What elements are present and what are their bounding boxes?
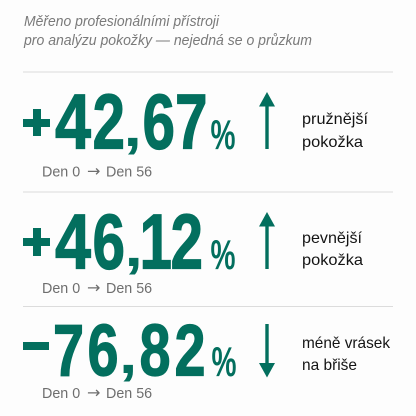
row: firmness [23, 198, 363, 297]
icon: arrow up [259, 212, 275, 269]
icon: arrow down [259, 324, 275, 378]
value: +42,67 %: 2 [92, 78, 125, 165]
row: wrinkles [23, 309, 391, 402]
period [42, 278, 152, 297]
value: +46,12 %: 6 [92, 198, 125, 285]
period: → [87, 278, 100, 297]
value: +42,67 %: 4 [55, 79, 91, 166]
value: −76,82 %: 7 [53, 309, 84, 391]
icon: arrow up [259, 92, 275, 149]
label [302, 111, 369, 151]
label: na břiše [302, 357, 357, 374]
value: +42,67 %: 6 [142, 78, 175, 165]
value: −76,82 %: 8 [140, 309, 171, 391]
value: +42,67 %: , [124, 96, 142, 158]
value: +46,12 % [23, 198, 236, 286]
period: Den 56 [106, 386, 152, 402]
value: −76,82 %: , [119, 323, 137, 385]
period: Den 56 [106, 281, 152, 297]
value: +42,67 % [23, 78, 236, 166]
value: −76,82 %: 6 [88, 309, 119, 391]
row: elasticity [23, 78, 369, 180]
value: −76,82 %: 2 [174, 309, 206, 391]
label: pevnější [302, 230, 363, 247]
value: −76,82 %: % [212, 338, 236, 385]
period [42, 383, 152, 402]
period: Den 0 [42, 164, 80, 180]
label: pokožka [302, 252, 363, 269]
label: méně vrásek [302, 335, 391, 352]
period: → [87, 383, 100, 402]
period [42, 162, 152, 180]
value: +42,67 %: % [210, 111, 236, 158]
value: +46,12 %: 1 [140, 198, 172, 285]
label [302, 230, 363, 269]
label: pokožka [302, 134, 363, 151]
period: Den 0 [42, 386, 80, 402]
value: +46,12 %: % [210, 231, 236, 278]
period: → [87, 162, 100, 180]
intro text [23, 14, 312, 49]
value: +46,12 %: 2 [170, 198, 203, 285]
value: +42,67 %: 7 [175, 78, 208, 165]
label [302, 335, 391, 374]
value: −76,82 % [23, 309, 236, 391]
period: Den 56 [106, 164, 152, 180]
period: Den 0 [42, 281, 80, 297]
intro text: pro analýzu pokožky — nejedná se o průzkum [23, 33, 312, 49]
value: +46,12 %: 4 [55, 199, 91, 286]
value: +46,12 %: , [124, 216, 143, 278]
intro text: Měřeno profesionálními přístroji [24, 14, 220, 30]
label: pružnější [302, 111, 369, 128]
